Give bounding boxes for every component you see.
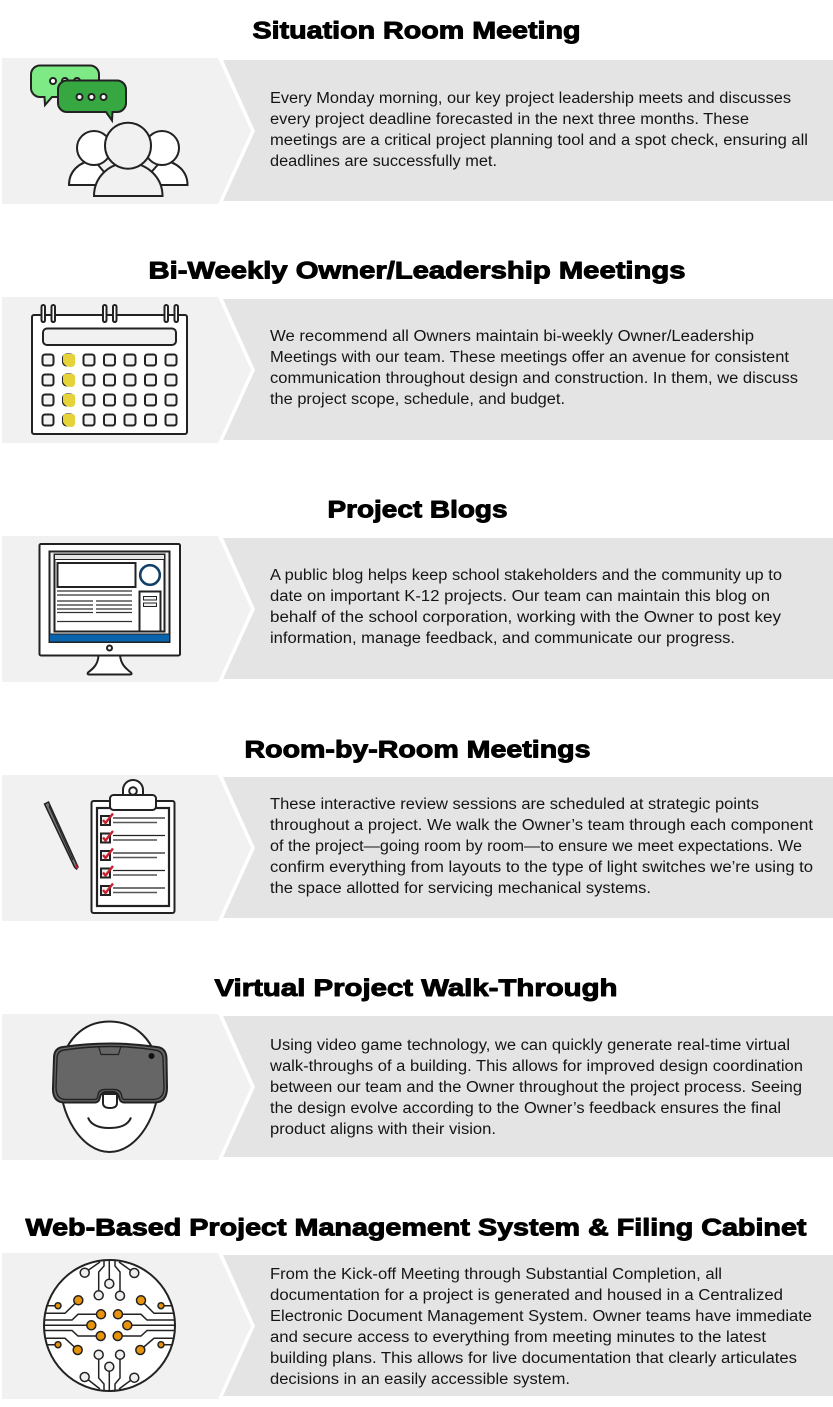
body text bbox=[270, 796, 814, 897]
icon: calendar bbox=[32, 305, 187, 434]
icon: desktop monitor with blog bbox=[40, 544, 180, 674]
body text: Electronic Document Management System. Owner teams have immediate bbox=[270, 1308, 812, 1325]
heading: Project Blogs bbox=[328, 496, 508, 524]
body text: We recommend all Owners maintain bi-weekly Owner/Leadership bbox=[270, 328, 754, 345]
body text: date on important K-12 projects. Our team can maintain this blog on bbox=[270, 588, 770, 605]
text panel bbox=[223, 777, 833, 918]
icon panel bbox=[2, 297, 251, 443]
body text: documentation for a project is generated and housed in a Centralized bbox=[270, 1287, 783, 1304]
body text bbox=[270, 1266, 812, 1388]
body text bbox=[269, 1037, 803, 1138]
icon panel bbox=[2, 58, 251, 204]
body text: and secure access to everything from meeting minutes to the latest bbox=[270, 1329, 767, 1346]
section: Bi-Weekly Owner/Leadership Meetings bbox=[2, 258, 833, 443]
icon panel bbox=[2, 1253, 251, 1399]
body text: From the Kick-off Meeting through Substantial Completion, all bbox=[270, 1266, 722, 1283]
body text: walk-throughs of a building. This allows for improved design coordination bbox=[269, 1058, 803, 1075]
heading: Virtual Project Walk-Through bbox=[214, 975, 618, 1002]
section: Room-by-Room Meetings bbox=[2, 736, 833, 921]
icon: chat bubbles and people bbox=[31, 66, 188, 196]
body text: Meetings with our team. These meetings offer an avenue for consistent bbox=[270, 349, 790, 366]
body text: These interactive review sessions are scheduled at strategic points bbox=[270, 796, 759, 813]
icon panel bbox=[2, 1014, 251, 1160]
text panel bbox=[223, 538, 833, 679]
body text: deadlines are successfully met. bbox=[270, 153, 497, 170]
body text: decisions in an easily accessible system. bbox=[270, 1371, 570, 1388]
section: Situation Room Meeting bbox=[2, 18, 833, 204]
text panel bbox=[223, 1016, 833, 1157]
body text: every project deadline forecasted in the next three months. These bbox=[270, 111, 749, 128]
body text: between our team and the Owner throughout the project process. Seeing bbox=[270, 1079, 802, 1096]
body text: confirm everything from layouts to the type of light switches we’re using to bbox=[270, 859, 813, 876]
body text: A public blog helps keep school stakeholders and the community up to bbox=[270, 567, 782, 584]
text panel bbox=[223, 1255, 833, 1396]
body text: information, manage feedback, and communicate our progress. bbox=[270, 630, 735, 647]
body text bbox=[270, 567, 782, 647]
body text: of the project—going room by room—to ensure we meet expectations. We bbox=[270, 838, 802, 855]
icon: face with VR headset bbox=[53, 1022, 167, 1152]
body text: product aligns with their vision. bbox=[270, 1121, 496, 1138]
text panel bbox=[223, 60, 833, 201]
section: Project Blogs bbox=[2, 496, 833, 682]
body text: meetings are a critical project planning tool and a spot check, ensuring all bbox=[270, 132, 808, 149]
body text: building plans. This allows for live documentation that clearly articulates bbox=[270, 1350, 797, 1367]
body text: Using video game technology, we can quickly generate real-time virtual bbox=[270, 1037, 790, 1054]
body text: behalf of the school corporation, working with the Owner to post key bbox=[270, 609, 781, 626]
heading: Web-Based Project Management System & Filing Cabinet bbox=[26, 1214, 806, 1242]
body text: the design evolve according to the Owner’s feedback ensures the final bbox=[270, 1100, 781, 1117]
text panel bbox=[223, 299, 833, 440]
icon panel bbox=[2, 536, 251, 682]
body text bbox=[270, 90, 808, 170]
body text: throughout a project. We walk the Owner’s team through each component bbox=[270, 817, 814, 834]
heading: Situation Room Meeting bbox=[252, 18, 580, 44]
body text bbox=[270, 328, 798, 408]
body text: Every Monday morning, our key project leadership meets and discusses bbox=[270, 90, 791, 107]
heading: Room-by-Room Meetings bbox=[244, 736, 590, 764]
icon: circuit globe bbox=[44, 1260, 175, 1392]
section: Virtual Project Walk-Through bbox=[2, 975, 833, 1160]
heading: Bi-Weekly Owner/Leadership Meetings bbox=[148, 258, 686, 284]
icon panel bbox=[2, 775, 251, 921]
section: Web-Based Project Management System & Filing Cabinet bbox=[2, 1214, 833, 1399]
body text: communication throughout design and construction. In them, we discuss bbox=[270, 370, 798, 387]
body text: the project scope, schedule, and budget. bbox=[270, 391, 565, 408]
icon: pencil and clipboard checklist bbox=[44, 780, 174, 913]
body text: the space allotted for servicing mechanical systems. bbox=[270, 880, 651, 897]
